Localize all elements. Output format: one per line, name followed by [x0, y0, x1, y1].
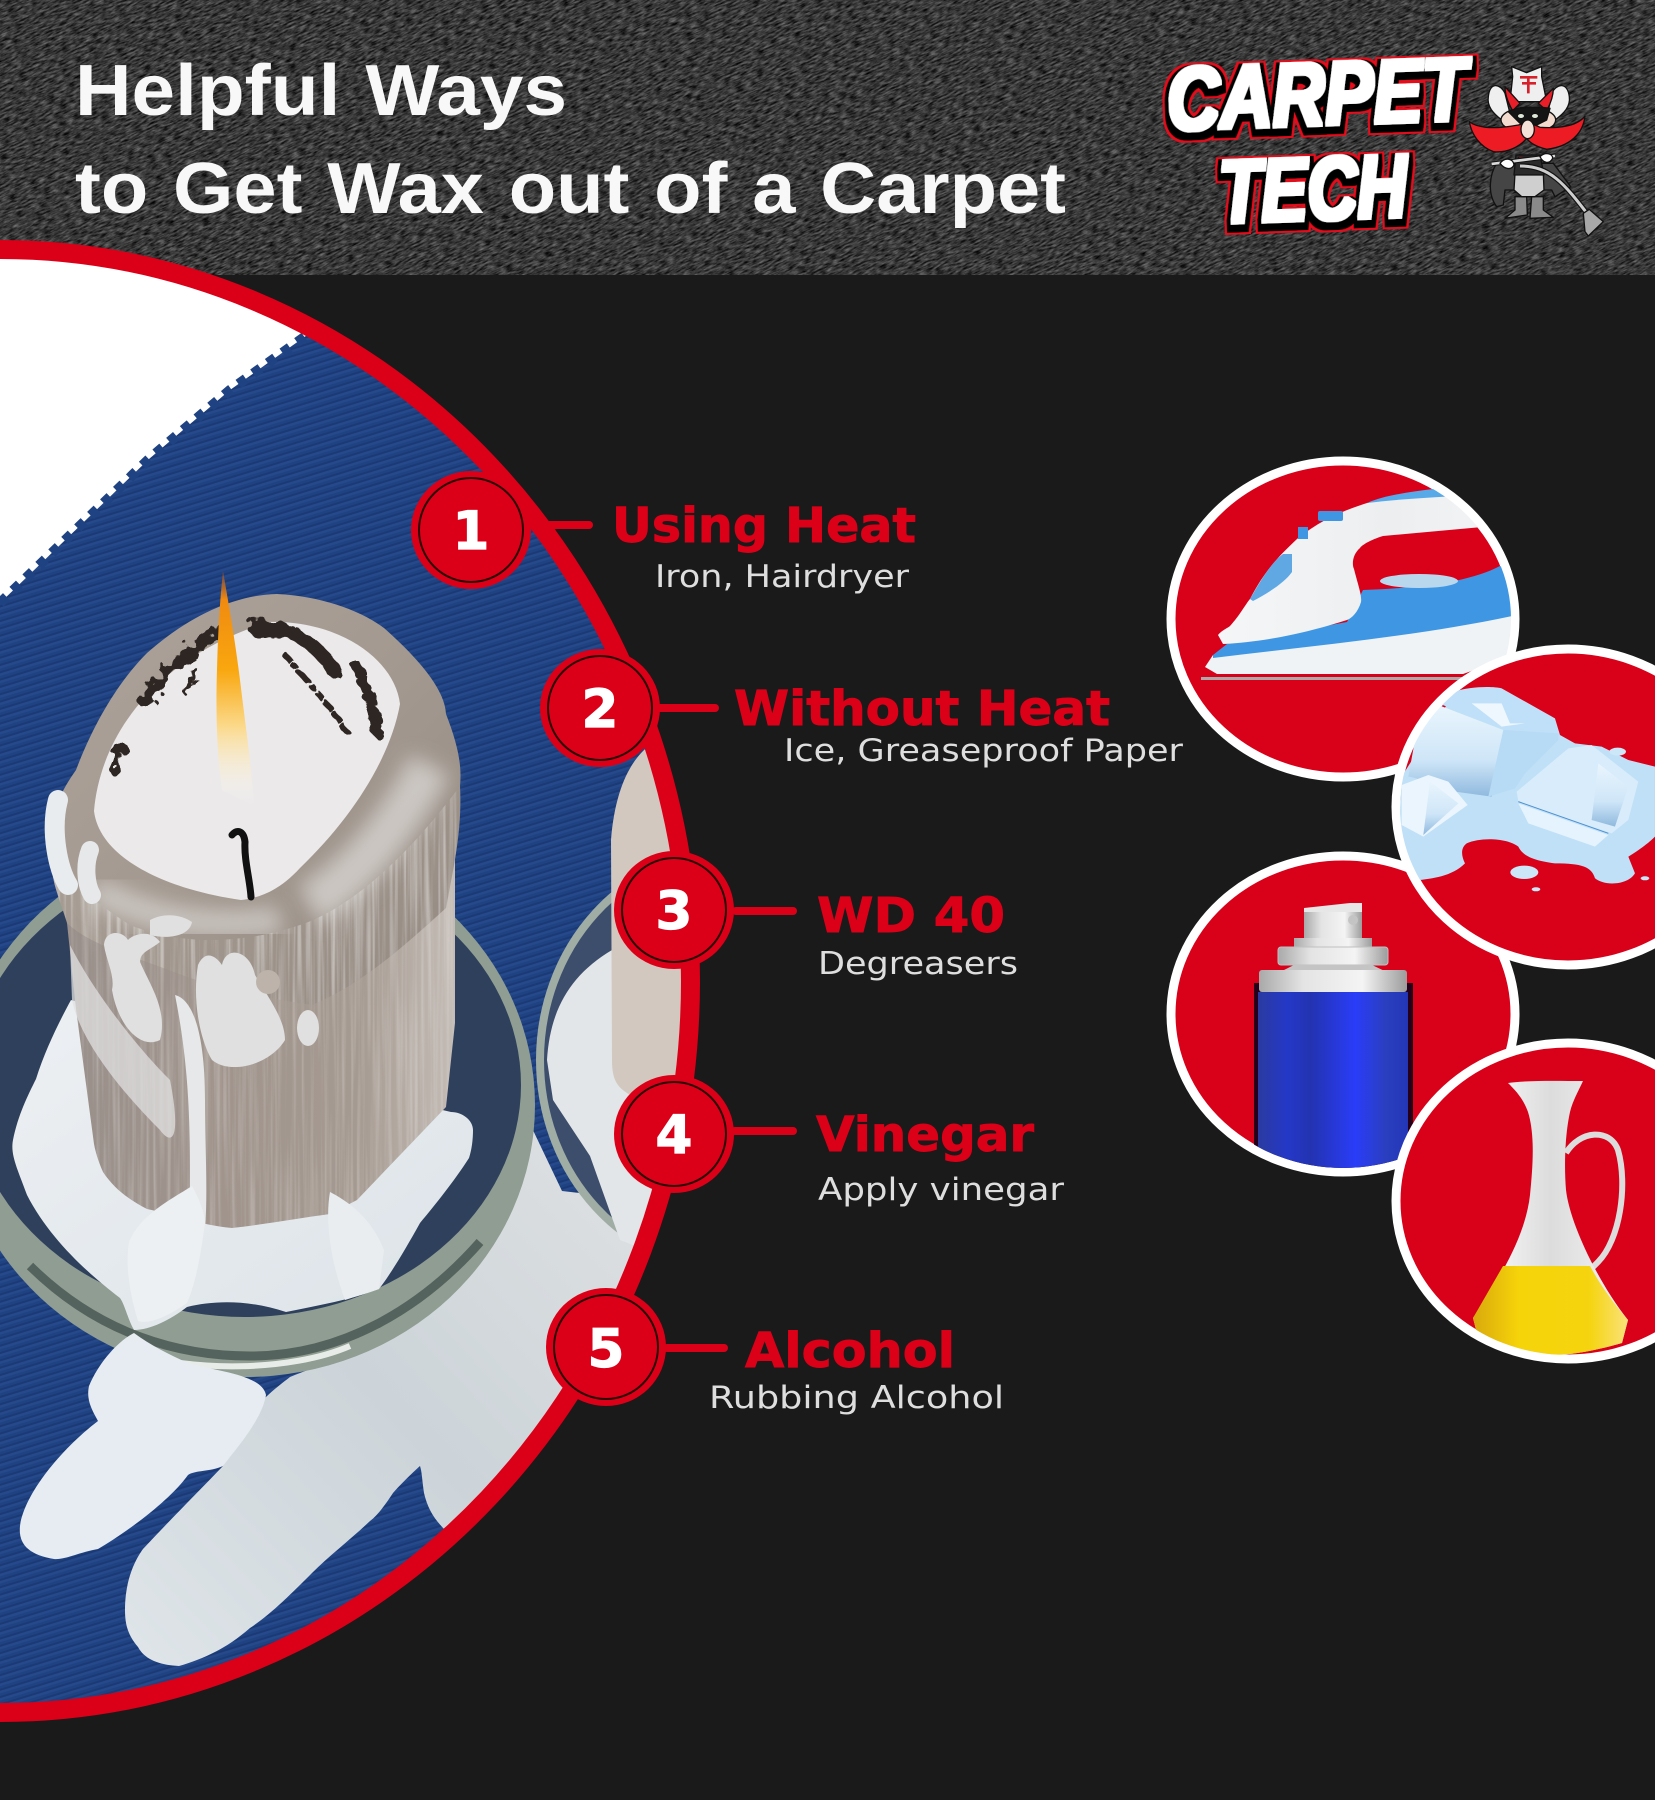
wax spill: long blob — [125, 1126, 640, 1666]
circle: iron — [1171, 461, 1560, 777]
wick — [232, 831, 251, 897]
badge 1 — [411, 471, 531, 589]
icon: melting ice cubes — [1398, 687, 1655, 891]
step 1: Using Heat: Using Heat — [612, 498, 916, 554]
badge 1: 1 — [453, 501, 489, 562]
step 2: Without Heat: Ice, Greaseproof Paper — [784, 733, 1183, 769]
step 4: Vinegar — [614, 1075, 1064, 1208]
step 5: Alcohol — [546, 1288, 1004, 1416]
title: to Get Wax out of a Carpet — [75, 149, 1066, 229]
candle wax well — [94, 622, 400, 900]
badge 3 — [614, 851, 734, 969]
red ring around photo — [0, 250, 690, 1712]
melted wax pool in dish — [12, 1000, 473, 1330]
title: Helpful Ways — [75, 51, 567, 131]
step 4: Vinegar: Apply vinegar — [818, 1172, 1064, 1208]
icon: aerosol can — [1254, 903, 1413, 1183]
icon: steam iron — [1201, 489, 1511, 680]
logo: Carpet Tech wordmark: CARPET — [1165, 40, 1474, 150]
badge 5 — [546, 1288, 666, 1406]
step 2: Without Heat — [540, 649, 1183, 769]
badge 5: 5 — [588, 1319, 624, 1380]
step 5: Alcohol: Alcohol — [745, 1323, 955, 1379]
step 3: WD 40: WD 40 — [817, 888, 1005, 944]
step 1: Using Heat: Iron, Hairdryer — [655, 559, 909, 595]
second glass dish and candle — [536, 749, 681, 1244]
main glass dish — [0, 897, 535, 1377]
logo: mascot with vacuum wand — [1469, 67, 1603, 236]
step 3: WD 40: Degreasers — [818, 946, 1018, 982]
badge 4 — [614, 1075, 734, 1193]
step 1: Using Heat — [411, 471, 916, 595]
badge 4: 4 — [656, 1105, 692, 1166]
step 2: Without Heat: Without Heat — [734, 681, 1110, 737]
step 4: Vinegar: Vinegar — [816, 1107, 1034, 1163]
candle rim — [51, 594, 460, 1005]
badge 2: 2 — [582, 679, 618, 740]
logo: Carpet Tech wordmark: TECH — [1217, 137, 1410, 243]
circle: ice — [1396, 649, 1655, 965]
candle body — [67, 847, 455, 1228]
title — [75, 51, 1066, 229]
badge 2 — [540, 649, 660, 767]
logo: Carpet Tech wordmark — [1165, 40, 1474, 243]
soot marks — [112, 628, 378, 770]
step 3: WD 40 — [614, 851, 1018, 982]
wax lumps at candle foot — [128, 1186, 384, 1322]
circle: spray can — [1171, 856, 1515, 1183]
wax drips on candle — [70, 915, 319, 1230]
blue cloth — [0, 333, 645, 1703]
step 5: Alcohol: Rubbing Alcohol — [709, 1380, 1004, 1416]
badge 3: 3 — [656, 881, 692, 942]
flame — [216, 572, 252, 776]
header band: carpet texture — [0, 0, 1655, 275]
circle: vinegar jug — [1396, 1043, 1655, 1359]
candle photo clipped in half circle — [0, 259, 681, 1703]
wax spill: short blob — [20, 1333, 266, 1559]
icon: glass cruet — [1473, 1081, 1628, 1355]
